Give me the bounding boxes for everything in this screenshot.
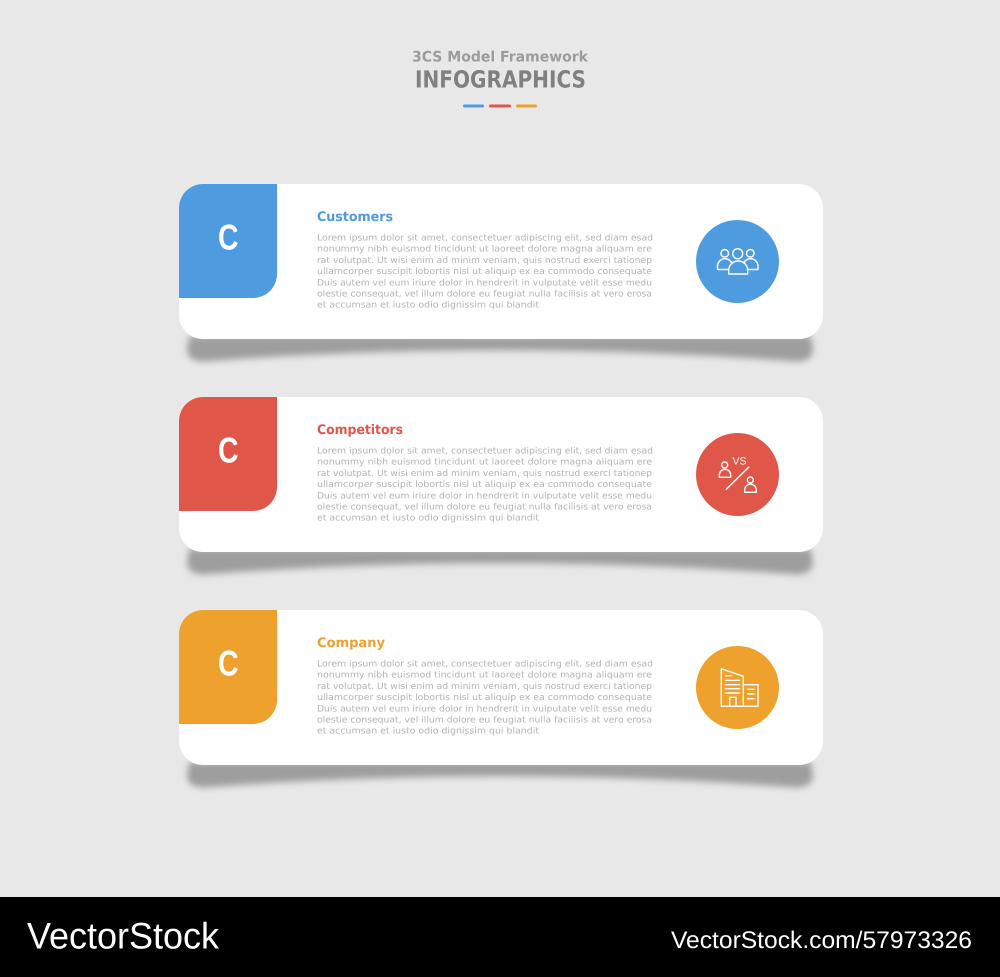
body text: ullamcorper suscipit lobortis nisl ut aliquip ex ea commodo consequate (317, 693, 652, 703)
panel: company (179, 610, 823, 788)
letter tab (179, 184, 277, 298)
body text: et accumsan et iusto odio dignissim qui blandit (317, 301, 540, 311)
subtitle: 3CS Model Framework (412, 50, 588, 66)
footer bar (0, 897, 1000, 977)
card (179, 397, 823, 552)
body text: rat volutpat. Ut wisi enim ad minim veniam, quis nostrud exerci tationep (317, 682, 652, 692)
icon: versus (696, 433, 779, 516)
letter tab (179, 397, 277, 511)
footer image id: VectorStock.com/57973326 (671, 927, 972, 954)
body text: olestie consequat, vel illum dolore eu feugiat nulla facilisis at vero erosa (317, 290, 652, 300)
body text: et accumsan et iusto odio dignissim qui blandit (317, 514, 540, 524)
icon: office building (696, 646, 779, 729)
body text: Lorem ipsum dolor sit amet, consectetuer adipiscing elit, sed diam esad (317, 234, 653, 244)
card shadow (187, 336, 813, 362)
body text: nonummy nibh euismod tincidunt ut laoreet dolore magna aliquam ere (317, 458, 652, 468)
icon: versus: VS (732, 456, 747, 468)
tab letter: C (218, 642, 238, 684)
body text: olestie consequat, vel illum dolore eu feugiat nulla facilisis at vero erosa (317, 502, 652, 512)
tab letter: C (218, 430, 238, 470)
panel: competitors (179, 397, 823, 575)
title: INFOGRAPHICS (415, 66, 586, 94)
body text: Duis autem vel eum iriure dolor in hendrerit in vulputate velit esse medu (317, 491, 652, 501)
body text: ullamcorper suscipit lobortis nisl ut aliquip ex ea commodo consequate (317, 267, 652, 277)
body text: ullamcorper suscipit lobortis nisl ut aliquip ex ea commodo consequate (317, 480, 652, 490)
body text: rat volutpat. Ut wisi enim ad minim veniam, quis nostrud exerci tationep (317, 256, 652, 266)
body text (317, 660, 653, 737)
footer logo: VectorStock (27, 916, 219, 956)
icon: people group (696, 220, 779, 303)
card (179, 184, 823, 339)
card (179, 610, 823, 765)
card shadow (187, 762, 813, 788)
heading: Customers (317, 210, 393, 225)
body text: Lorem ipsum dolor sit amet, consectetuer adipiscing elit, sed diam esad (317, 660, 653, 670)
body text: nonummy nibh euismod tincidunt ut laoreet dolore magna aliquam ere (317, 245, 652, 255)
body text (317, 234, 653, 311)
heading: Competitors (317, 423, 403, 438)
letter tab (179, 610, 277, 724)
body text (317, 446, 653, 524)
body text: rat volutpat. Ut wisi enim ad minim veniam, quis nostrud exerci tationep (317, 469, 652, 479)
body text: Lorem ipsum dolor sit amet, consectetuer adipiscing elit, sed diam esad (317, 446, 653, 456)
body text: olestie consequat, vel illum dolore eu feugiat nulla facilisis at vero erosa (317, 716, 652, 726)
body text: Duis autem vel eum iriure dolor in hendrerit in vulputate velit esse medu (317, 278, 652, 288)
header (412, 50, 588, 108)
heading: Company (317, 636, 385, 651)
panel: customers (179, 184, 823, 362)
card shadow (187, 549, 813, 575)
body text: et accumsan et iusto odio dignissim qui blandit (317, 727, 540, 737)
body text: Duis autem vel eum iriure dolor in hendrerit in vulputate velit esse medu (317, 704, 652, 714)
body text: nonummy nibh euismod tincidunt ut laoreet dolore magna aliquam ere (317, 671, 652, 681)
title accent dashes (463, 104, 537, 108)
tab letter: C (218, 216, 238, 258)
